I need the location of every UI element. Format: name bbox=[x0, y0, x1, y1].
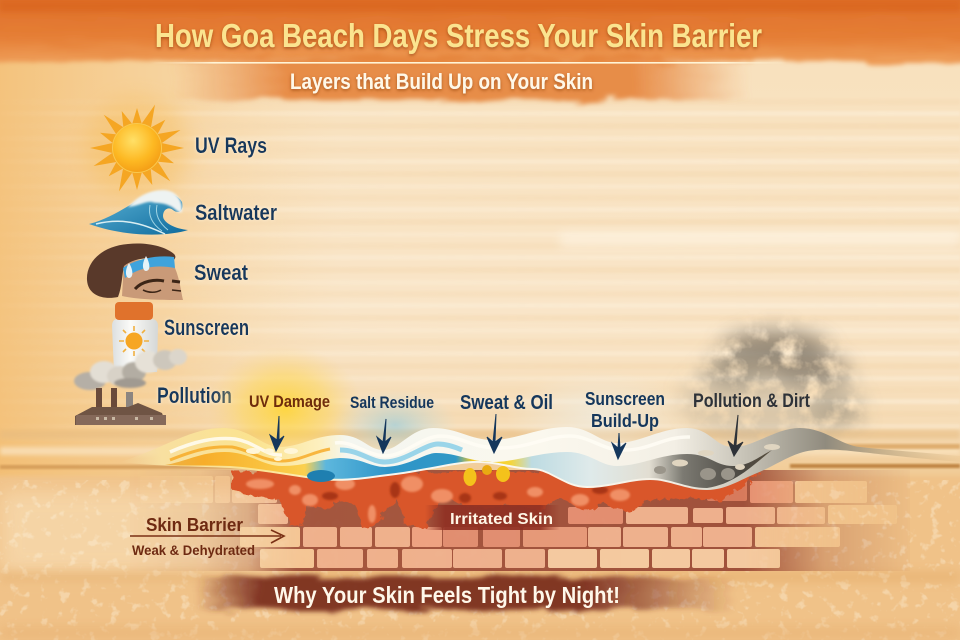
label: Sunscreen Build-Up: Sunscreen bbox=[585, 388, 665, 409]
header band bbox=[0, 0, 960, 100]
label: Weak & Dehydrated: Weak & Dehydrated bbox=[132, 542, 255, 558]
icon: sunscreen bottle bbox=[112, 302, 158, 372]
arrow: Skin Barrier bbox=[130, 530, 284, 543]
smog cloud: pollution and dirt bbox=[680, 330, 865, 442]
label: Saltwater: Saltwater bbox=[195, 200, 277, 225]
bottom banner bbox=[195, 577, 735, 610]
build-up layers wave bbox=[120, 427, 960, 490]
ground: lower sand with speckle bbox=[0, 430, 960, 640]
arrow: UV Damage bbox=[270, 416, 284, 451]
glow: salt haze bbox=[333, 389, 457, 461]
label: Sunscreen Build-Up: Build-Up bbox=[591, 410, 659, 431]
icon: wave bbox=[89, 190, 188, 235]
arrow: Pollution & Dirt bbox=[728, 415, 743, 456]
label: Sweat: Sweat bbox=[194, 260, 249, 285]
label: UV Damage: UV Damage bbox=[249, 392, 330, 411]
background: sand and sky bbox=[0, 58, 960, 478]
arrow: Sweat & Oil bbox=[487, 414, 502, 453]
glow: sunscreen haze bbox=[505, 371, 695, 459]
label: Sweat & Oil: Sweat & Oil bbox=[460, 392, 553, 414]
label: irritated skin: Irritated Skin bbox=[450, 511, 553, 528]
arrow: Sunscreen Build-Up bbox=[612, 433, 626, 459]
footer message: Why Your Skin Feels Tight by Night! bbox=[274, 582, 620, 608]
icon: sun bbox=[85, 96, 189, 200]
label: Pollution: Pollution bbox=[157, 383, 232, 408]
label: Sunscreen: Sunscreen bbox=[164, 315, 249, 340]
icon: factory and smoke bbox=[74, 349, 187, 425]
brick wall: skin barrier bbox=[130, 470, 910, 571]
label: Skin Barrier: Skin Barrier bbox=[146, 515, 243, 535]
glow: UV sun damage bbox=[207, 346, 363, 470]
subtitle: Layers that Build Up on Your Skin bbox=[290, 69, 593, 94]
arrow: Salt Residue bbox=[377, 419, 391, 453]
label: Pollution & Dirt: Pollution & Dirt bbox=[693, 391, 811, 412]
title: How Goa Beach Days Stress Your Skin Barrier bbox=[155, 17, 762, 54]
panel: irritated skin label band bbox=[425, 505, 560, 530]
divider under title bbox=[150, 62, 790, 64]
label: UV Rays: UV Rays bbox=[195, 133, 267, 158]
label: Salt Residue: Salt Residue bbox=[350, 393, 434, 412]
irritated skin layer with drips bbox=[232, 472, 760, 528]
icon: sweating face bbox=[87, 243, 183, 300]
